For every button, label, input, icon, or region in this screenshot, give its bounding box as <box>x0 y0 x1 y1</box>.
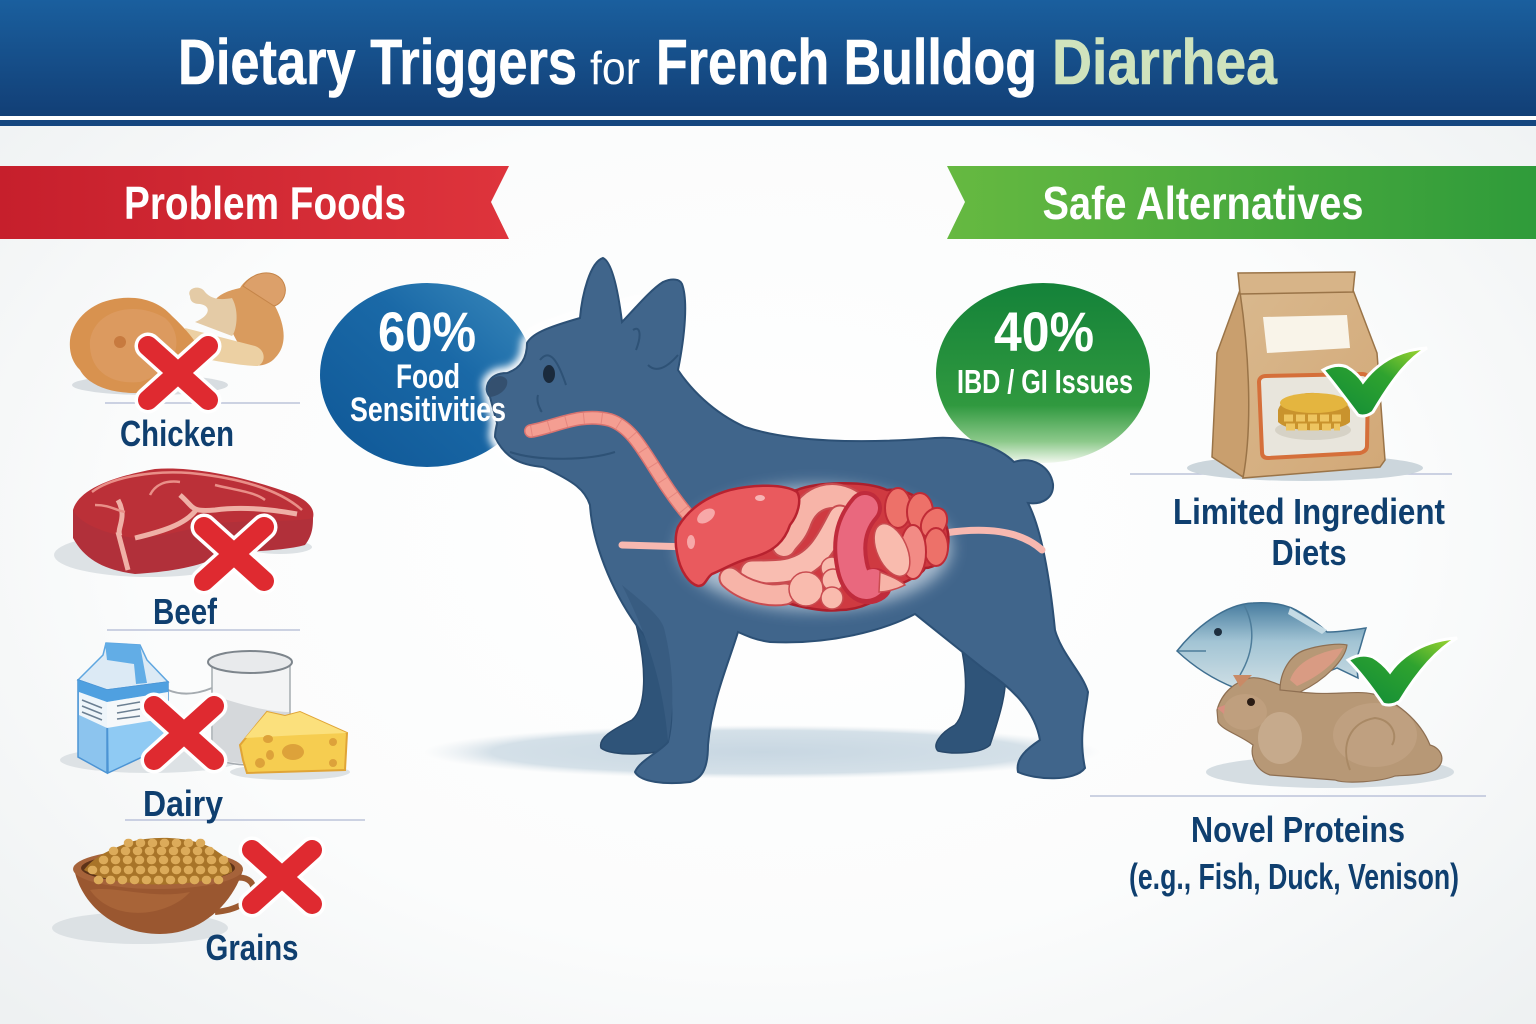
check mark <box>1348 638 1457 705</box>
milk carton <box>78 643 168 690</box>
title: French Bulldog <box>656 26 1037 98</box>
panel heading: safe alternatives: Safe Alternatives <box>1042 177 1364 229</box>
stat bubble: 40% IBD / GI issues: IBD / GI Issues <box>957 363 1133 400</box>
label: grains: Grains <box>206 927 298 968</box>
stat bubble text: 60% food sensitivities <box>350 300 506 429</box>
check mark <box>1323 348 1427 416</box>
food item: grains <box>52 838 312 968</box>
white halo around dog <box>488 303 678 480</box>
colon tubes <box>622 545 690 547</box>
organ glow <box>679 486 951 610</box>
rabbit <box>1217 678 1442 782</box>
right segments <box>885 488 952 579</box>
panel heading: problem foods <box>0 166 509 239</box>
far legs <box>601 620 1006 754</box>
pale small intestine loops <box>730 496 853 595</box>
dog nose <box>488 376 507 397</box>
intestine backing <box>722 483 948 611</box>
milk glass <box>212 662 290 765</box>
title: Diarrhea <box>1052 26 1277 98</box>
food item: limited ingredient diets bag <box>1173 272 1445 573</box>
title: Dietary Triggers <box>178 26 577 98</box>
food item: chicken <box>70 273 285 454</box>
stat bubble text: 60% food sensitivities: Sensitivities <box>350 391 506 429</box>
x mark <box>252 850 312 904</box>
food item: beef <box>54 469 313 632</box>
liver <box>676 486 799 586</box>
stat bubble text: 60% food sensitivities: Food <box>396 358 460 396</box>
header banner <box>0 0 1536 126</box>
dog shading <box>622 585 672 742</box>
label: limited ingredient diets: Diets <box>1272 532 1346 573</box>
chicken bones <box>189 288 237 336</box>
right thigh <box>215 273 285 365</box>
stat bubble text: 60% food sensitivities: 60% <box>378 300 476 363</box>
label: limited ingredient diets: Limited Ingredient <box>1173 491 1445 532</box>
steak side <box>73 500 313 574</box>
x mark <box>204 527 264 581</box>
label: chicken: Chicken <box>120 413 234 454</box>
title: for <box>590 42 640 94</box>
x mark <box>148 346 208 400</box>
food item: dairy <box>60 643 350 824</box>
pink bowel segment <box>850 508 875 587</box>
cheese wedge <box>240 712 347 773</box>
bowl <box>75 870 243 934</box>
stat bubble: 60% shape <box>320 283 534 467</box>
label: beef: Beef <box>153 591 218 632</box>
steak top <box>73 469 313 538</box>
dog eye <box>543 365 555 383</box>
panel heading: safe alternatives <box>947 166 1536 239</box>
left drumstick <box>70 298 200 393</box>
food item: novel proteins fish and rabbit <box>1129 603 1459 897</box>
panel heading: problem foods: Problem Foods <box>124 177 406 229</box>
x mark <box>154 706 214 760</box>
dog body <box>487 258 1088 783</box>
stat bubble: 40% IBD / GI issues <box>936 283 1150 463</box>
fish <box>1177 603 1366 689</box>
dog illustration <box>487 258 1088 783</box>
grain pile <box>84 838 232 884</box>
label: dairy: Dairy <box>143 783 223 824</box>
dog ear and face folds <box>510 329 678 459</box>
dog ground shadow <box>424 725 1100 779</box>
stat bubble: 40% IBD / GI issues: 40% <box>994 300 1094 363</box>
title <box>178 26 1277 98</box>
label: novel proteins: Novel Proteins <box>1191 809 1405 850</box>
esophagus <box>531 418 688 515</box>
